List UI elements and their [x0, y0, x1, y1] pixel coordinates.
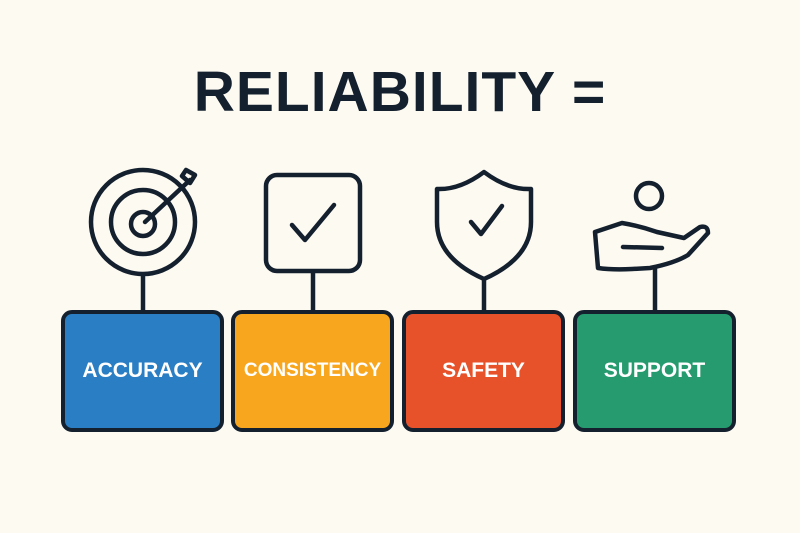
- title: RELIABILITY =: [194, 60, 606, 124]
- box: support: [573, 310, 736, 432]
- icon: target: [91, 170, 195, 310]
- box: support: SUPPORT: [604, 359, 705, 382]
- box: safety: SAFETY: [442, 359, 525, 382]
- box: safety: [402, 310, 565, 432]
- icon: shield: [437, 172, 531, 310]
- box: consistency: CONSISTENCY: [244, 360, 381, 381]
- box: consistency: [231, 310, 394, 432]
- icon: hand with person: [595, 183, 708, 310]
- box: accuracy: [61, 310, 224, 432]
- icon: checkbox: [266, 175, 360, 310]
- box: accuracy: ACCURACY: [82, 359, 203, 382]
